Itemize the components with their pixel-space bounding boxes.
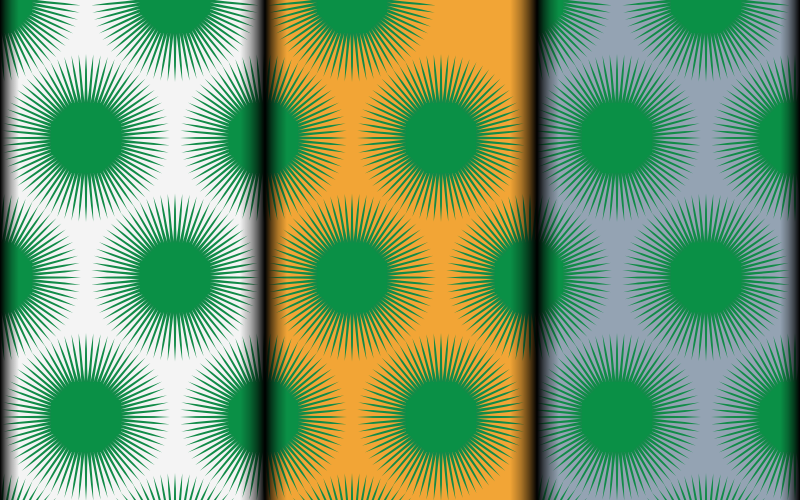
panel: blue-gray pattern bbox=[537, 0, 800, 500]
panel: white pattern bbox=[0, 0, 265, 500]
panel: orange pattern bbox=[265, 0, 537, 500]
